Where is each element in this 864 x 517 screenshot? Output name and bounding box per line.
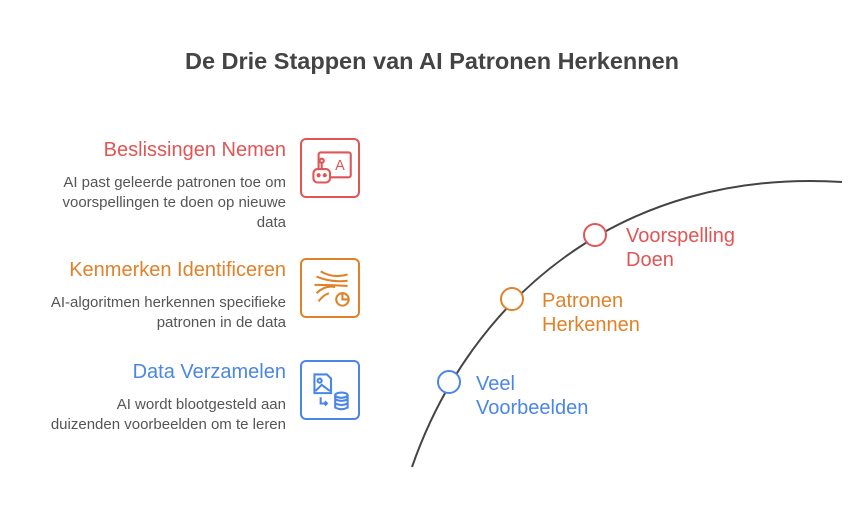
text: data — [51, 396, 286, 433]
text: kenmerken: AI-algoritmen herkennen specifieke — [51, 294, 286, 311]
heading: kenmerken: Kenmerken Identificeren — [69, 259, 286, 281]
label: patronen — [542, 290, 640, 336]
title: De Drie Stappen van AI Patronen Herkennen — [185, 48, 679, 74]
label: patronen: Herkennen — [542, 314, 640, 336]
icon: data — [300, 360, 360, 420]
text: data: AI wordt blootgesteld aan — [117, 396, 286, 413]
icon: robot: A — [335, 158, 345, 174]
text: data: duizenden voorbeelden om te leren — [51, 416, 286, 433]
text: beslissingen — [62, 174, 286, 231]
marker: voorbeelden — [438, 371, 460, 393]
marker: patronen — [501, 288, 523, 310]
text: kenmerken: patronen in de data — [157, 314, 286, 331]
heading: beslissingen: Beslissingen Nemen — [104, 139, 286, 161]
label: voorbeelden: Veel — [476, 373, 515, 395]
label: voorbeelden: Voorbeelden — [476, 397, 588, 419]
label: voorspelling: Doen — [626, 249, 674, 271]
icon: robot — [300, 138, 360, 198]
marker: voorspelling — [584, 224, 606, 246]
label: voorspelling: Voorspelling — [626, 225, 735, 247]
text: beslissingen: AI past geleerde patronen toe om — [63, 174, 286, 191]
label: voorspelling — [626, 225, 735, 271]
label: patronen: Patronen — [542, 290, 623, 312]
text: kenmerken — [51, 294, 286, 331]
text: beslissingen: data — [257, 214, 286, 231]
heading: data: Data Verzamelen — [133, 361, 286, 383]
text: beslissingen: voorspellingen te doen op nieuwe — [62, 194, 286, 211]
label: voorbeelden — [476, 373, 588, 419]
icon: patterns — [300, 258, 360, 318]
